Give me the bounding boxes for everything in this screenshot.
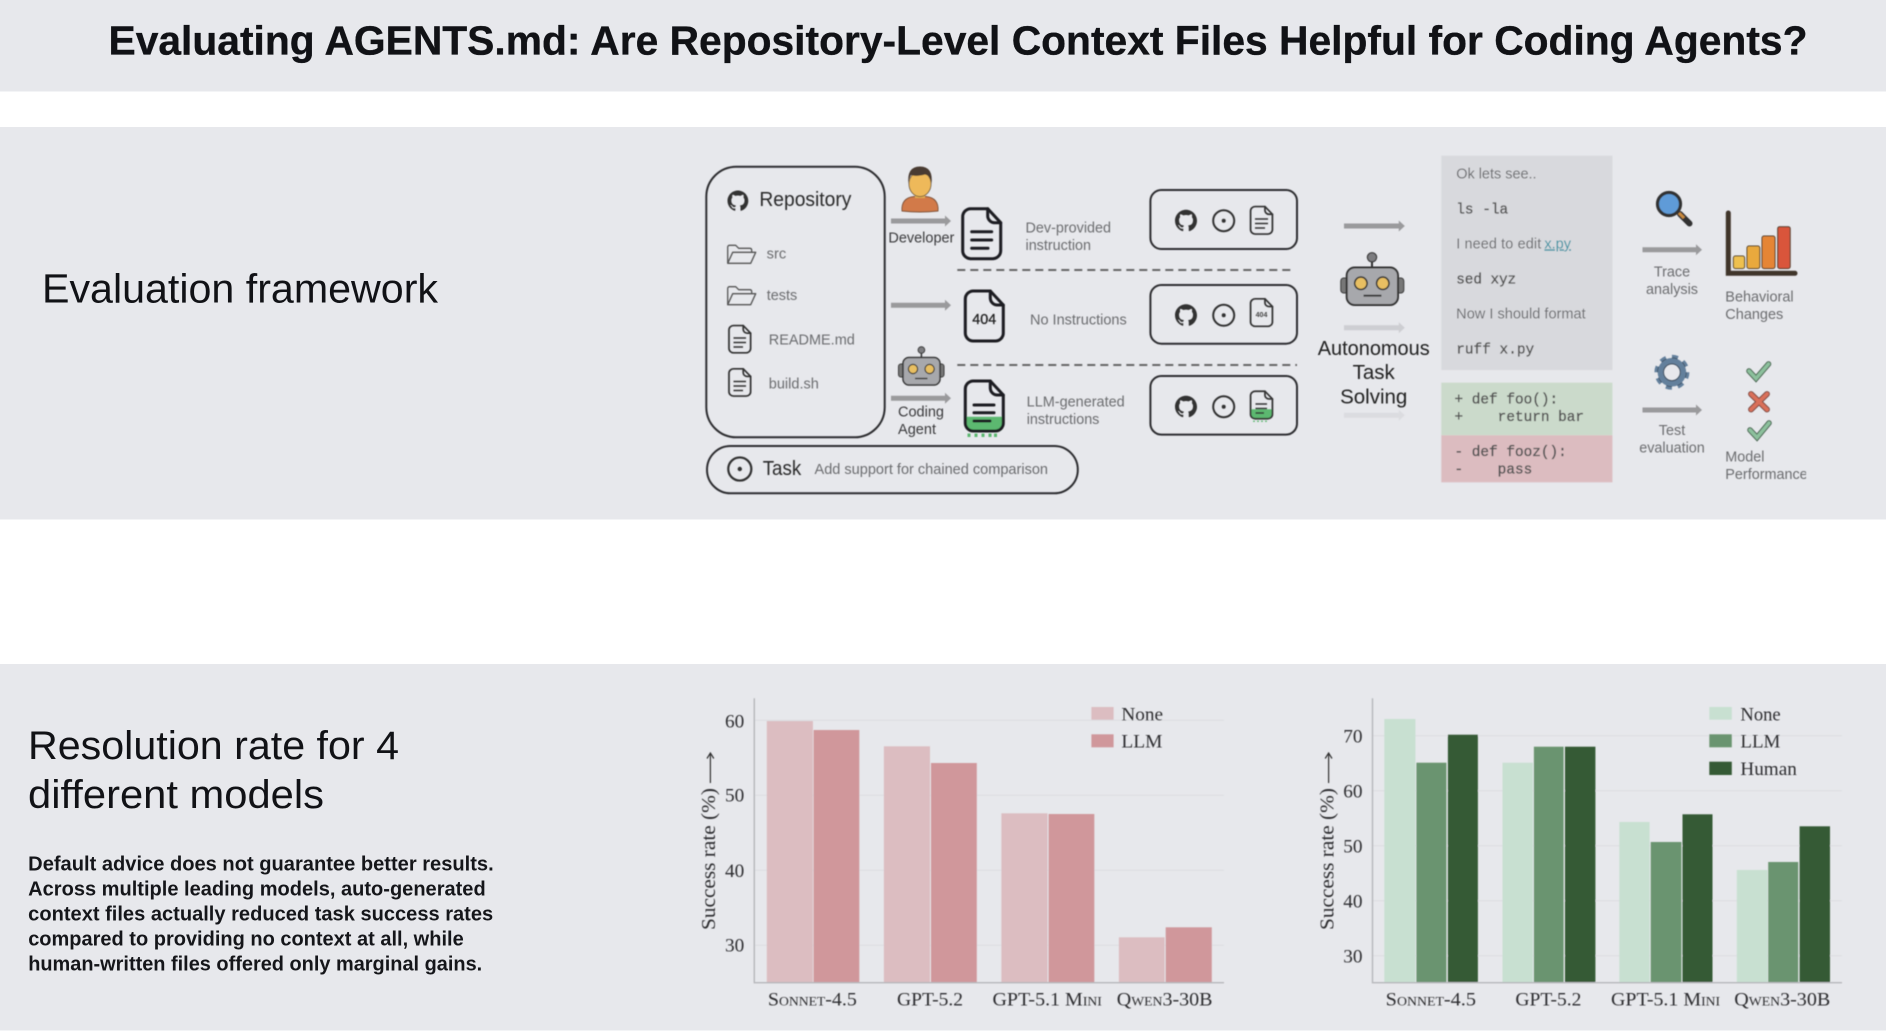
panel: evaluation framework — [0, 127, 1886, 520]
panel: removed diff — [1441, 435, 1612, 482]
bars: gpt-5.1 mini — [1001, 813, 1094, 982]
y axis ticks: 30 — [725, 936, 744, 957]
box: no context: 404 — [1256, 312, 1267, 319]
panel: resolution rate — [0, 664, 1886, 1030]
bars: sonnet-4.5 — [767, 721, 859, 982]
y axis ticks: 50 — [725, 786, 744, 807]
panel: removed diff: - def fooz(): — [1454, 445, 1567, 461]
icon: build file — [729, 369, 751, 396]
arrow: developer — [891, 216, 951, 226]
x axis labels: GPT-5.2 — [1515, 990, 1581, 1011]
icon: tests folder — [728, 287, 756, 305]
panel: agent trace — [1441, 156, 1612, 370]
text block: takeaway: human-written files offered only marginal gains. — [28, 954, 482, 976]
icon: magnifier — [1658, 192, 1690, 224]
text block: takeaway: context files actually reduced task success rates — [28, 904, 493, 926]
icon: developer — [902, 166, 938, 212]
repository label: Repository — [759, 189, 851, 211]
panel: agent trace: Ok lets see.. — [1456, 166, 1537, 182]
autonomous task solving label: Solving — [1340, 385, 1407, 408]
panel: agent trace: ruff x.py — [1456, 342, 1535, 358]
text block: takeaway: Default advice does not guarantee better results. — [28, 854, 494, 876]
box: llm context — [1150, 376, 1297, 435]
coding agent label: Agent — [898, 422, 936, 438]
bars: qwen3-30b — [1737, 826, 1830, 982]
autonomous task solving label: Autonomous — [1318, 337, 1430, 360]
repository box — [706, 167, 885, 437]
icon: github — [728, 190, 748, 211]
title: Evaluating AGENTS.md: Are Repository-Level Context Files Helpful for Coding Agents? — [108, 18, 1808, 64]
y axis ticks: 50 — [1343, 836, 1362, 857]
arrow: to agent trace — [1344, 220, 1405, 232]
icon: 404 document — [965, 291, 1003, 341]
bar chart: none vs llm — [699, 698, 1224, 1011]
x axis labels: Qwen3-30B — [1117, 990, 1212, 1011]
box: no context — [1150, 285, 1297, 344]
arrow: faded lower — [1344, 410, 1405, 421]
arrow: no instructions — [891, 300, 951, 311]
icon: coding agent robot — [898, 347, 944, 385]
panel: agent trace: Now I should format — [1456, 306, 1586, 322]
y axis ticks — [1343, 726, 1362, 967]
icon: 404 document: 404 — [972, 312, 996, 328]
icon: llm-generated document — [965, 381, 1004, 437]
x axis labels: GPT-5.1 Mini — [992, 990, 1102, 1011]
legend: LLM — [1121, 732, 1163, 753]
icon: second check — [1750, 423, 1769, 438]
legend — [1091, 704, 1163, 753]
panel: removed diff: - pass — [1454, 462, 1532, 478]
heading: evaluation framework: Evaluation framework — [42, 265, 439, 311]
task pill — [707, 446, 1078, 493]
panel: added diff — [1441, 383, 1612, 435]
developer label: Developer — [888, 231, 955, 247]
icon: gear — [1656, 357, 1687, 388]
x axis labels — [1386, 990, 1830, 1011]
task pill: Add support for chained comparison — [814, 462, 1048, 478]
coding agent label: Coding — [898, 405, 944, 421]
bar chart: none vs llm vs human — [1317, 698, 1842, 1011]
test evaluation label: evaluation — [1639, 440, 1705, 456]
x axis labels: GPT-5.2 — [897, 990, 963, 1011]
arrow: coding agent — [891, 393, 951, 404]
model performance label — [1726, 450, 1807, 480]
x axis labels: Qwen3-30B — [1734, 990, 1830, 1011]
trace analysis label: analysis — [1646, 282, 1698, 298]
task pill: Task — [763, 458, 802, 480]
heading: resolution rate: Resolution rate for 4 — [28, 724, 399, 768]
text block: takeaway: compared to providing no context at all, while — [28, 929, 464, 951]
y axis ticks: 30 — [1343, 946, 1362, 967]
llm-generated label: LLM-generated — [1027, 395, 1125, 411]
readme label: README.md — [769, 333, 855, 349]
y axis ticks: 40 — [1343, 891, 1362, 912]
panel: agent trace: I need to edit — [1456, 236, 1541, 252]
legend: Human — [1740, 759, 1797, 780]
icon: cross — [1751, 394, 1767, 410]
y axis title: Success rate (%) — [699, 788, 720, 930]
y axis ticks — [725, 711, 744, 957]
legend — [1709, 704, 1797, 780]
icon: src folder — [728, 245, 756, 263]
test evaluation label: Test — [1659, 423, 1685, 439]
build label: build.sh — [769, 376, 819, 392]
src label: src — [767, 246, 786, 262]
arrow: trace analysis — [1642, 244, 1702, 255]
panel: added diff: + return bar — [1454, 410, 1584, 426]
legend: None — [1740, 704, 1781, 725]
behavioral changes label: Changes — [1725, 307, 1783, 323]
tests label: tests — [767, 288, 797, 304]
bars: gpt-5.1 mini — [1619, 814, 1712, 982]
behavioral changes label: Behavioral — [1725, 290, 1794, 306]
dev-provided label: instruction — [1026, 238, 1091, 254]
y axis ticks: 60 — [1343, 781, 1362, 802]
panel: title band — [0, 0, 1886, 92]
llm-generated label: instructions — [1027, 412, 1099, 428]
heading: resolution rate: different models — [28, 773, 324, 817]
bars: sonnet-4.5 — [1384, 719, 1478, 982]
y axis ticks: 70 — [1343, 726, 1362, 747]
icon: dev-provided document — [963, 209, 1001, 259]
icon: bar chart — [1728, 213, 1795, 273]
x axis labels — [768, 990, 1212, 1011]
box: dev-provided context — [1150, 190, 1297, 249]
panel: agent trace: x.py — [1544, 236, 1572, 252]
dev-provided label: Dev-provided — [1026, 221, 1111, 237]
panel: agent trace: ls -la — [1456, 202, 1509, 218]
panel: added diff: + def foo(): — [1454, 392, 1558, 408]
x axis labels: GPT-5.1 Mini — [1611, 990, 1720, 1011]
y axis ticks: 60 — [725, 711, 744, 732]
trace analysis label: Trace — [1654, 265, 1690, 281]
model performance label: Model — [1725, 450, 1765, 466]
y axis title: Success rate (%) — [1317, 788, 1338, 930]
icon: first check — [1749, 364, 1768, 378]
x axis labels: Sonnet-4.5 — [1386, 990, 1476, 1011]
icon: readme file — [729, 326, 751, 353]
autonomous task solving label: Task — [1353, 361, 1396, 384]
bars: gpt-5.2 — [1502, 747, 1595, 982]
model performance label: Performance — [1725, 467, 1808, 483]
bars: qwen3-30b — [1119, 927, 1212, 982]
no instructions label: No Instructions — [1030, 312, 1127, 328]
arrow: test evaluation — [1642, 404, 1702, 416]
x axis labels: Sonnet-4.5 — [768, 990, 857, 1011]
bars: gpt-5.2 — [884, 746, 977, 982]
panel: agent trace: sed xyz — [1456, 272, 1516, 288]
icon: autonomous robot — [1341, 253, 1404, 305]
framework diagram — [706, 156, 1808, 493]
text block: takeaway: Across multiple leading models, auto-generated — [28, 879, 486, 901]
arrow: faded middle — [1344, 322, 1405, 333]
legend: None — [1121, 704, 1163, 725]
legend: LLM — [1740, 732, 1781, 753]
y axis ticks: 40 — [725, 861, 744, 882]
